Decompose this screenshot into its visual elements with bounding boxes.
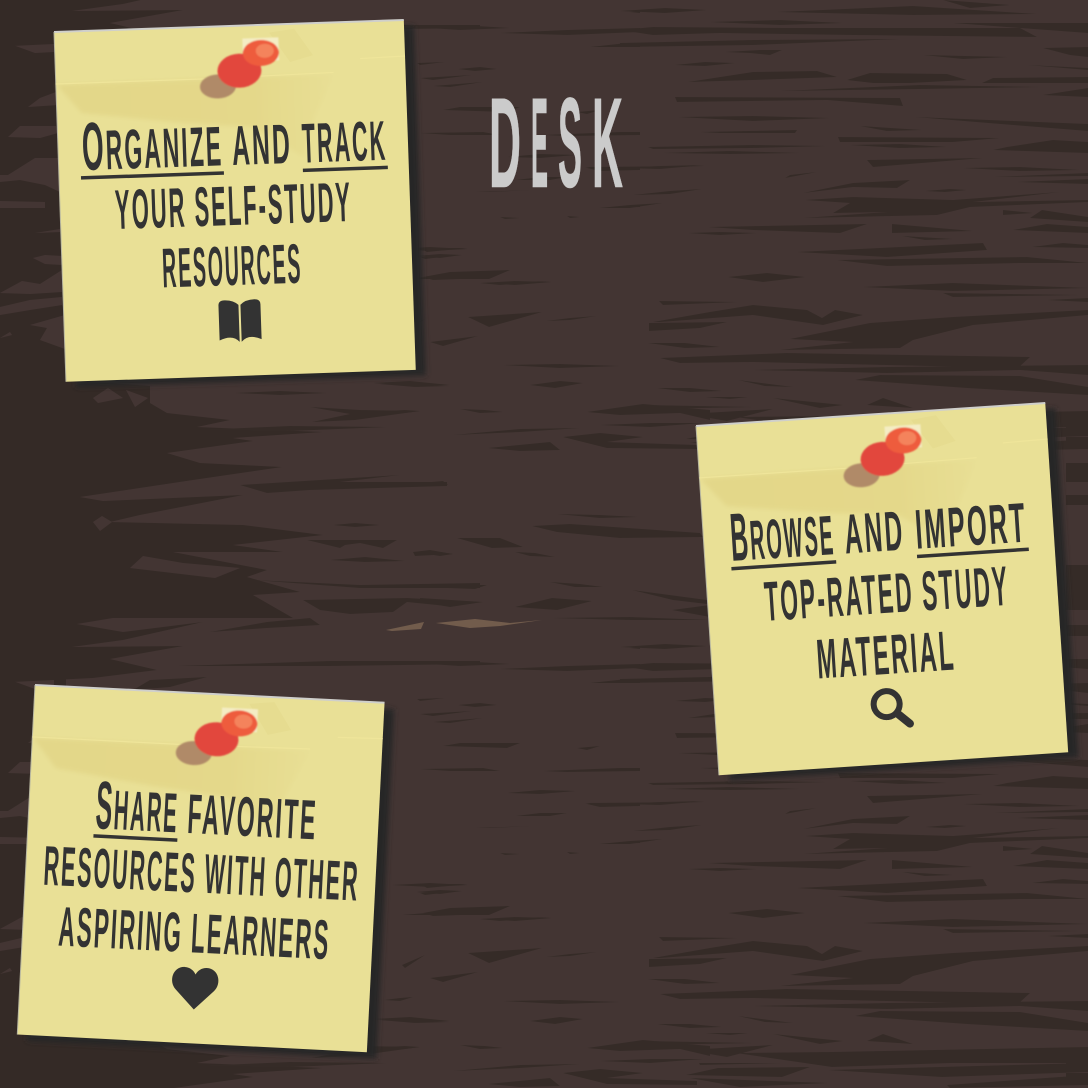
- icon: push pin: [841, 424, 924, 488]
- text: share favorite: SHARE: [94, 767, 181, 847]
- panel: sticky note organize: RESOURCES: [161, 232, 303, 299]
- text: organize and track: AND: [231, 112, 293, 177]
- text: browse and import: AND: [842, 499, 906, 565]
- title: [489, 72, 623, 215]
- title: S: [558, 72, 582, 215]
- panel: sticky note organize: TRACK: [301, 109, 388, 175]
- icon: push pin: [198, 37, 280, 99]
- text: browse and import: BROWSE: [728, 493, 837, 576]
- title: D: [489, 72, 521, 215]
- text: K: [592, 72, 623, 215]
- title: E: [531, 72, 548, 215]
- icon: heart: [171, 966, 219, 1011]
- icon: magnifying glass: [873, 690, 910, 726]
- panel: sticky note share: [17, 685, 395, 1059]
- panel: sticky note organize: [54, 20, 426, 388]
- panel: sticky note organize: YOUR SELF-STUDY: [114, 170, 353, 241]
- icon: open book: [218, 299, 262, 343]
- text: ASPIRING LEARNERS: [57, 895, 332, 971]
- panel: sticky note share: FAVORITE: [186, 782, 319, 851]
- text: organize and track: ORGANIZE: [81, 104, 224, 185]
- icon: push pin: [175, 705, 258, 768]
- panel: sticky note browse: [696, 402, 1079, 781]
- text: RESOURCES WITH OTHER: [42, 834, 361, 913]
